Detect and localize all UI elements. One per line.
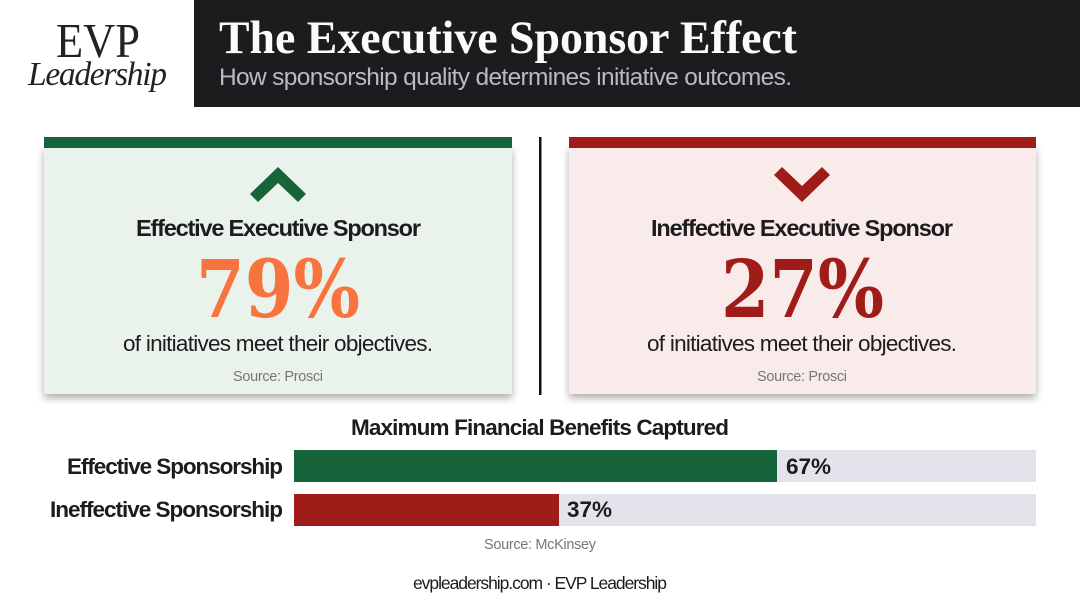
chart source: Source: McKinsey <box>484 537 597 553</box>
source: Source: Prosci <box>233 369 323 385</box>
logo: EVP Leadership: EVP <box>56 13 140 68</box>
source: Source: Prosci <box>757 369 847 385</box>
panel: effective executive sponsor <box>44 137 512 394</box>
stat: 79%: 79% <box>196 242 360 336</box>
panel: ineffective executive sponsor <box>569 137 1036 394</box>
icon: up chevron <box>250 167 306 202</box>
bar row: ineffective sponsorship 37%: Ineffective Sponsorship <box>50 497 283 522</box>
bar row: effective sponsorship 67% <box>67 450 1036 482</box>
bar row: ineffective sponsorship 37%: 37% <box>567 497 612 522</box>
icon: down chevron <box>774 167 830 202</box>
description: of initiatives meet their objectives. <box>647 331 957 356</box>
description: of initiatives meet their objectives. <box>123 331 433 356</box>
stat: 27%: 27% <box>721 242 884 336</box>
bar chart: maximum financial benefits captured <box>50 415 1036 553</box>
logo: EVP Leadership: Leadership <box>27 56 167 93</box>
bar row: effective sponsorship 67%: 67% <box>786 454 831 479</box>
subtitle: How sponsorship quality determines initiative outcomes. <box>219 64 792 91</box>
panel heading: Ineffective Executive Sponsor <box>651 215 953 241</box>
footer: evpleadership.com · EVP Leadership <box>413 573 667 593</box>
chart title: Maximum Financial Benefits Captured <box>351 415 729 440</box>
title: The Executive Sponsor Effect <box>219 12 797 64</box>
logo: EVP Leadership <box>27 13 167 93</box>
bar row: effective sponsorship 67%: Effective Sponsorship <box>67 454 283 479</box>
vertical divider <box>539 137 542 395</box>
header banner <box>194 0 1080 107</box>
panel heading: Effective Executive Sponsor <box>136 215 421 241</box>
bar row: ineffective sponsorship 37% <box>50 494 1036 526</box>
